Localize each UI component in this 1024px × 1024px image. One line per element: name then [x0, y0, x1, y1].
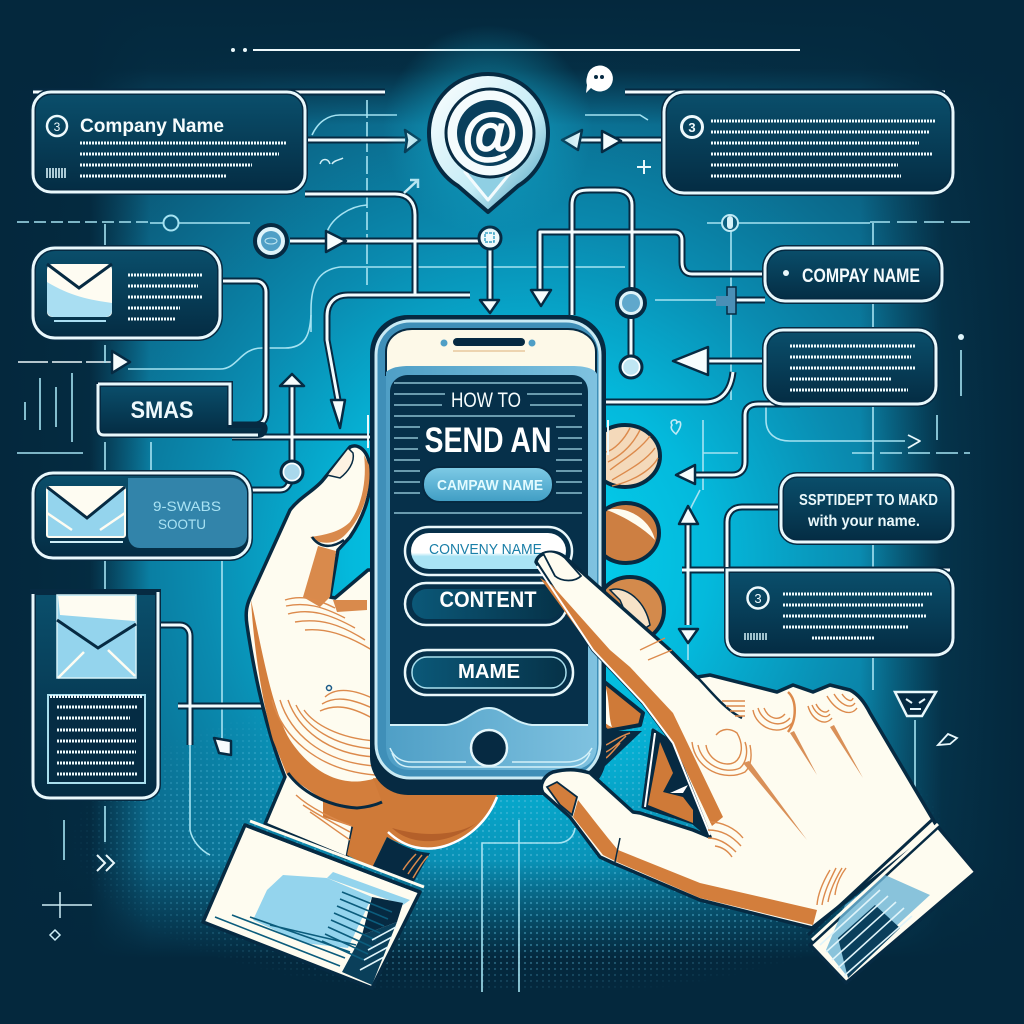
badge [748, 588, 768, 608]
hatch triangle [598, 731, 642, 768]
button: name: MAME [458, 661, 520, 683]
halftone stripes [322, 892, 392, 960]
panel: company name right [765, 248, 942, 301]
thumb nail [547, 782, 577, 815]
thumb orange band [573, 800, 618, 862]
speaker [440, 338, 536, 351]
left cuff [203, 821, 424, 988]
panel: email 2 [33, 473, 250, 558]
icon: envelope [57, 595, 136, 678]
palm crease [288, 773, 382, 808]
text lines [783, 594, 933, 638]
small decorative icons [42, 48, 964, 940]
icon: at sign map pin [429, 74, 548, 212]
connector lines [33, 92, 950, 745]
icon: envelope [47, 264, 112, 321]
finger 3 [596, 577, 664, 643]
orange palm under phone [323, 778, 497, 868]
heading: send an: SEND AN [424, 421, 552, 460]
hand shape [536, 552, 938, 928]
web between thumb and index [643, 730, 712, 837]
text lines [80, 143, 286, 176]
bezel top [386, 329, 596, 375]
finger crease [697, 677, 742, 718]
knuckle rings [692, 729, 751, 775]
text box [48, 695, 145, 783]
heading: how to: HOW TO [451, 389, 521, 412]
button: content: CONTENT [440, 587, 537, 612]
label: 9-SWABS [153, 498, 221, 514]
screen [390, 375, 588, 725]
right hand [536, 552, 938, 928]
badge [682, 116, 702, 138]
finger 4 [590, 680, 643, 731]
arrowheads [112, 130, 920, 755]
left hand [246, 446, 497, 883]
heading: Company Name [80, 116, 224, 137]
wrist shadow [372, 837, 430, 883]
text lines [790, 346, 916, 390]
text lines [128, 275, 202, 319]
screen stripes [394, 383, 582, 513]
panel: top right [664, 92, 953, 193]
button: company name [405, 527, 572, 575]
side buttons [368, 415, 608, 455]
node circles [164, 215, 738, 483]
label: SMAS [130, 397, 194, 424]
glow behind at icon [383, 25, 593, 235]
finger 1 [590, 425, 660, 487]
finger 2 [593, 503, 659, 563]
button: campaign name: CAMPAW NAME [437, 477, 543, 494]
cuff top band [250, 821, 424, 887]
thumb crease [303, 546, 336, 607]
button: name [405, 650, 573, 695]
panel: tall email [33, 592, 158, 798]
hatch near web and wrist [708, 822, 743, 857]
panel: top left company name [33, 92, 305, 192]
panel: SMAS [98, 384, 265, 435]
panel: email left [33, 248, 220, 338]
blue patch [253, 875, 372, 948]
palm and thumb [246, 446, 378, 858]
callout text: with your name. [807, 513, 920, 530]
button: company name: CONVENY NAME [429, 541, 542, 558]
knuckle tendons [743, 725, 863, 840]
home button [471, 730, 507, 766]
panel: lines right [765, 330, 936, 404]
icon: envelope [47, 487, 125, 542]
right cuff [808, 818, 978, 984]
barcode [745, 633, 766, 640]
label: SOOTU [158, 516, 206, 532]
bezel blue [386, 366, 597, 770]
button: campaign name [423, 467, 553, 502]
callout text: SSPTIDEPT TO MAKD [799, 492, 938, 509]
text lines [711, 121, 935, 176]
panel: text callout right [781, 475, 953, 542]
background gradient [86, 71, 962, 988]
skin lines [285, 598, 372, 650]
thumb nail [327, 448, 353, 478]
phone [368, 315, 608, 795]
hand lower orange edge [617, 850, 817, 925]
button: content [405, 583, 567, 625]
at glyph: @ [462, 102, 518, 166]
index finger orange edge [540, 578, 723, 826]
badge [47, 116, 67, 136]
barcode [47, 168, 65, 178]
thumb orange edge [310, 455, 370, 543]
panel: bottom right [727, 570, 953, 655]
back fingers [590, 425, 664, 768]
icon: plug connector [716, 287, 736, 314]
orange palm edge [251, 600, 382, 808]
phone body [370, 315, 606, 795]
badge: 3 [54, 120, 61, 134]
badge: 3 [688, 120, 696, 135]
label: COMPAY NAME [802, 266, 920, 287]
badge: 3 [754, 591, 762, 606]
fingertip nail [543, 552, 581, 580]
